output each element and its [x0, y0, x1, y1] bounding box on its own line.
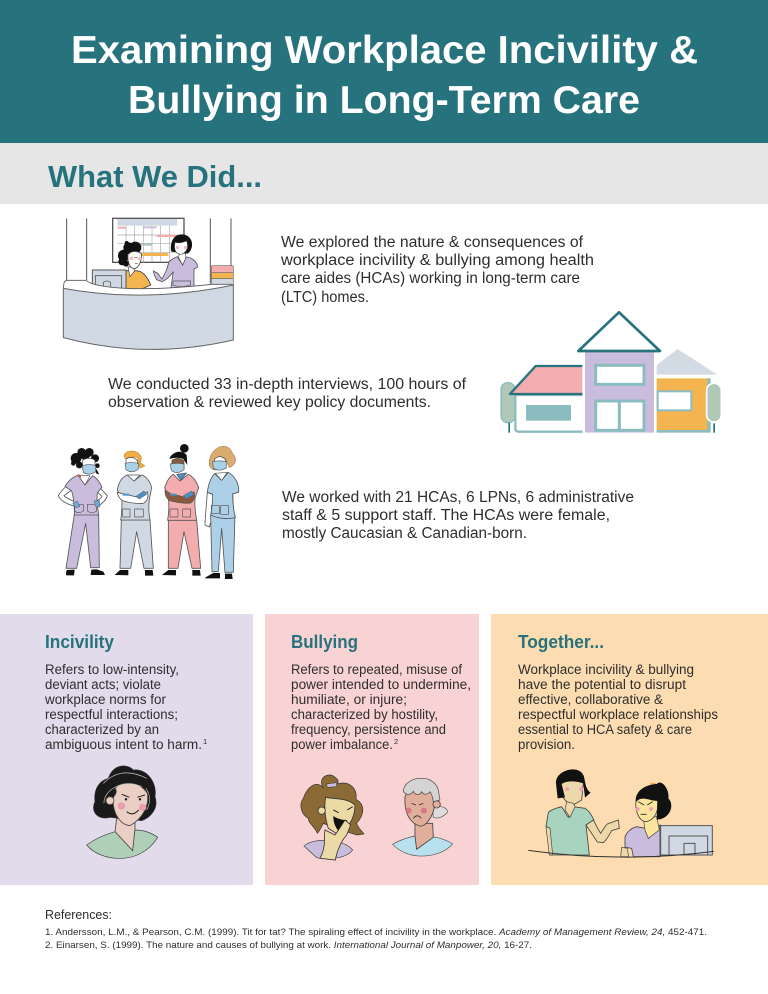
panel text: Incivility definition: [44, 662, 207, 752]
panel text: Bullying definition: Refers to repeated, misuse of: [291, 662, 462, 677]
panel text: Bullying definition: power imbalance.: [291, 737, 393, 752]
text block: who we worked with: [282, 489, 634, 542]
upset older woman: [393, 778, 453, 856]
icon: smirking woman: [87, 766, 158, 858]
standing worker: [153, 234, 198, 290]
panel text: Together description: effective, collaborative &: [518, 692, 663, 707]
nurse 4: [205, 446, 239, 579]
nurse 2: [115, 451, 153, 576]
panel heading: Together: Together...: [518, 632, 604, 652]
icon: long-term care home building: [501, 312, 721, 433]
text block: who we worked with: staff & 5 support staff. The HCAs were female,: [282, 507, 610, 524]
panel text: Together description: provision.: [518, 737, 575, 752]
panel text: Together description: essential to HCA safety & care: [518, 722, 692, 737]
title: Examining Workplace Incivility &: [71, 29, 698, 72]
laughing woman: [301, 775, 364, 860]
text block: what we explored: [280, 234, 594, 306]
title: Bullying in Long-Term Care: [128, 79, 640, 122]
section band: What We Did: [0, 143, 768, 204]
reference 1: 1. Andersson, L.M., & Pearson, C.M. (1999). Tit for tat? The spiraling effect of incivility in the workplace. Academy of Management Review, 24, 452-471.: [45, 927, 707, 937]
panel text: Together description: have the potential to disrupt: [518, 677, 686, 692]
text block: what we explored: (LTC) homes.: [281, 289, 369, 306]
panel heading: Bullying: Bullying: [291, 632, 358, 652]
panel text: Incivility definition: 1: [203, 737, 207, 746]
text block: what we explored: We explored the nature & consequences of: [281, 234, 584, 251]
panel text: Bullying definition: humiliate, or injure;: [291, 692, 407, 707]
panel text: Incivility definition: ambiguous intent to harm.: [45, 737, 202, 752]
icon: two staff in tense conversation at desk: [528, 769, 714, 857]
panel text: Incivility definition: characterized by an: [45, 722, 159, 737]
text block: interviews and observation: observation & reviewed key policy documents.: [108, 394, 431, 411]
text block: who we worked with: mostly Caucasian & Canadian-born.: [282, 525, 527, 542]
icon: laughing woman and upset older woman: [301, 775, 453, 860]
panel text: Bullying definition: frequency, persistence and: [291, 722, 446, 737]
text block: what we explored: workplace incivility & bullying among health: [280, 252, 594, 269]
text block: interviews and observation: [108, 376, 467, 411]
panel text: Bullying definition: [291, 662, 471, 752]
header banner: [0, 0, 768, 143]
panel: Incivility: [0, 614, 253, 885]
text block: interviews and observation: We conducted 33 in-depth interviews, 100 hours of: [108, 376, 467, 393]
title: [71, 29, 698, 122]
seated worker: [118, 241, 151, 291]
panel heading: Incivility: Incivility: [45, 632, 114, 652]
text block: what we explored: care aides (HCAs) working in long-term care: [281, 270, 580, 287]
references heading: References:: [45, 907, 112, 922]
text block: who we worked with: We worked with 21 HCAs, 6 LPNs, 6 administrative: [282, 489, 634, 506]
panel text: Bullying definition: 2: [394, 737, 398, 746]
panel text: Together description: respectful workplace relationships: [518, 707, 718, 722]
icon: reception desk with two staff: [63, 218, 233, 349]
panel text: Together description: Workplace incivility & bullying: [518, 662, 694, 677]
icon: four care aides in scrubs and masks: [58, 444, 239, 579]
panel text: Together description: [518, 662, 718, 752]
panel text: Bullying definition: characterized by hostility,: [291, 707, 438, 722]
panel text: Incivility definition: Refers to low-intensity,: [45, 662, 179, 677]
panel text: Incivility definition: workplace norms for: [44, 692, 166, 707]
panel: Bullying: [265, 614, 479, 885]
references: [45, 907, 707, 950]
reference 2: 2. Einarsen, S. (1999). The nature and causes of bullying at work. International Journal of Manpower, 20, 16-27.: [45, 940, 532, 950]
panel text: Incivility definition: respectful interactions;: [45, 707, 178, 722]
panel: Together: [491, 614, 768, 885]
nurse 3: [162, 444, 201, 576]
section heading: What We Did...: [48, 159, 262, 194]
panel text: Incivility definition: deviant acts; violate: [45, 677, 161, 692]
panel text: Bullying definition: power intended to undermine,: [291, 677, 471, 692]
nurse 1: [58, 448, 107, 575]
